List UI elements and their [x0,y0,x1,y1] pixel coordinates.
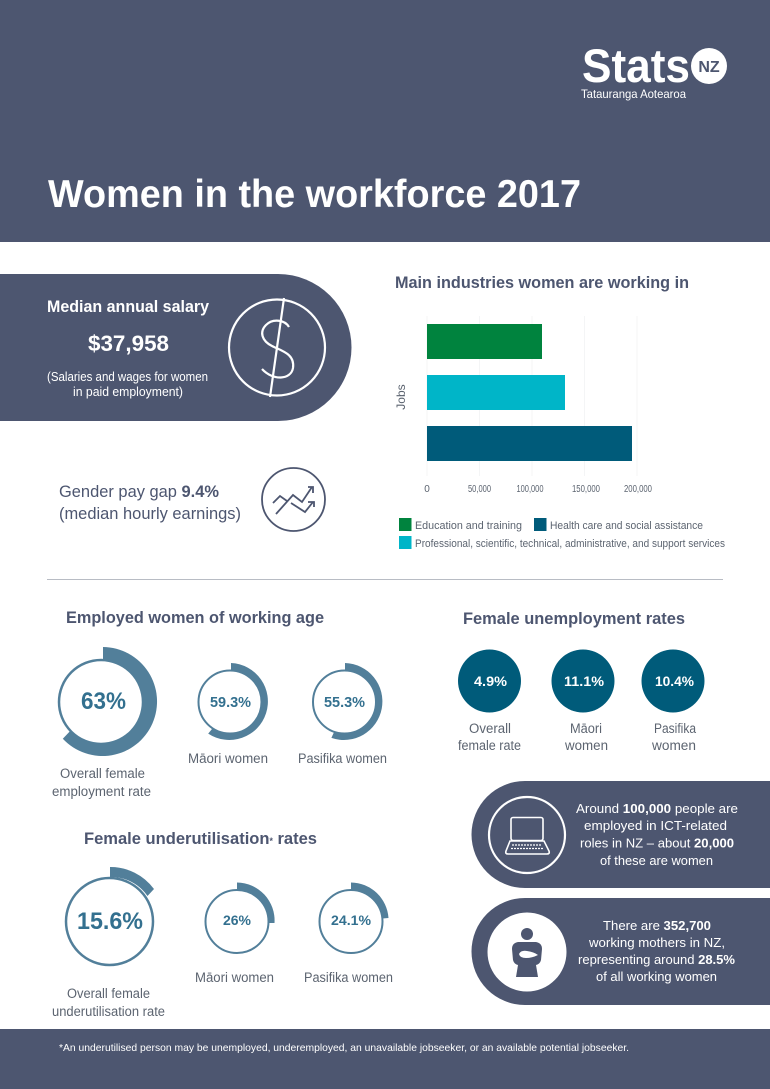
panel: employed women of working age [52,608,387,799]
gender pay gap text: Gender pay gap 9.4% [59,482,219,501]
working mothers text: There are 352,700 [603,918,711,933]
x axis tick labels: 50,000 [468,484,491,495]
label: overall female rate: female rate [458,738,521,753]
circle: Pasifika 10.4%: 10.4% [655,674,694,689]
donut: Pasifika 24.1% [320,882,388,953]
title: Women in the workforce 2017 [48,173,581,216]
legend: Professional, scientific, technical, administrative, and support services [415,538,725,550]
panel: median annual salary [0,274,352,421]
x axis tick labels [424,484,652,495]
x axis tick labels: 0 [424,484,430,495]
footer band [0,1029,770,1089]
donut: Māori 26%: 26% [223,912,252,928]
label: Pasifika women [651,721,696,753]
icon: trend lines [262,468,325,531]
donut: Māori 59.3% [198,663,268,740]
donut: Pasifika 24.1%: 24.1% [331,912,372,928]
footnote: *An underutilised person may be unemployed, underemployed, an unavailable jobseeker, or an available potential jobseeker. [59,1042,629,1054]
ICT text: of these are women [600,853,713,868]
heading: main industries: Main industries women are working in [395,273,689,292]
legend: Health care and social assistance [550,520,703,532]
label: Māori women: Māori women [188,751,268,766]
donut: overall 63% [59,647,157,756]
ICT text: employed in ICT-related [584,818,727,833]
working mothers text [578,918,735,984]
logo: Stats NZ: Stats [582,39,690,92]
circle: Māori 11.1%: 11.1% [564,674,604,689]
legend [399,518,725,550]
x axis tick labels: 100,000 [516,484,544,495]
label: Māori women [564,721,608,753]
salary value: $37,958 [88,331,169,356]
donut: Pasifika 55.3%: 55.3% [324,694,365,711]
header banner [0,0,770,242]
circle: overall 4.9%: 4.9% [474,674,507,689]
salary note: in paid employment) [73,385,183,399]
panel: working mothers [471,898,770,1005]
label: Pasifika women: Pasifika women [304,970,393,985]
circle: overall 4.9% [458,650,521,712]
heading: female unemployment: Female unemployment rates [463,609,685,628]
salary note [47,370,208,399]
panel: ICT employment [471,781,770,888]
donut: Pasifika 55.3% [313,663,382,740]
donut: overall 63%: 63% [81,688,126,715]
label: overall female rate: Overall [469,721,511,736]
ICT text: roles in NZ – about 20,000 [580,836,734,850]
label: Pasifika women: Pasifika [654,721,696,736]
label: Māori women: women [564,738,608,753]
x axis tick labels: 200,000 [624,484,652,495]
label: Pasifika women: women [651,738,696,753]
gender pay gap text: (median hourly earnings) [59,504,241,523]
logo: Stats NZ: Tatauranga Aotearoa [581,87,686,101]
gender pay gap text [59,482,241,523]
bar: education and training [427,324,542,359]
label: Māori women: Māori [570,721,602,736]
label: overall female employment rate: employment rate [52,784,151,799]
label: overall female employment rate: Overall female [60,766,145,781]
ICT text [576,801,738,868]
working mothers text: representing around 28.5% [578,952,735,967]
label: overall female underutilisation rate [52,986,165,1019]
label: Māori women: Māori women [195,970,274,985]
bar chart: main industries [394,316,725,550]
bar: health care [427,426,632,461]
icon: dollar sign [229,298,325,397]
label: overall female employment rate [52,766,151,799]
icon: laptop [489,797,565,873]
donut: Māori 26% [206,882,275,953]
label: overall female underutilisation rate: Overall female [67,986,150,1001]
panel: female unemployment rates [458,609,704,753]
donut: overall 15.6% [66,867,154,965]
donut: Māori 59.3%: 59.3% [210,694,251,711]
heading: underutilisation: Female underutilisation* rates [84,829,317,848]
circle: Pasifika 10.4% [642,650,704,712]
salary note: (Salaries and wages for women [47,370,208,384]
icon: mother and baby [488,912,566,992]
heading: median annual salary: Median annual salary [47,297,210,316]
heading: employed women: Employed women of working age [66,608,324,627]
ICT text: Around 100,000 people are [576,801,738,816]
x axis tick labels: 150,000 [572,484,600,495]
circle: Māori 11.1% [552,650,614,712]
working mothers text: of all working women [596,969,717,984]
label: Pasifika women: Pasifika women [298,751,387,766]
logo: Stats NZ [581,39,727,101]
donut: overall 15.6%: 15.6% [77,908,143,935]
working mothers text: working mothers in NZ, [588,935,725,950]
logo: Stats NZ: NZ [698,59,720,76]
label: overall female underutilisation rate: underutilisation rate [52,1004,165,1019]
label: overall female rate [458,721,521,753]
bar: professional services [427,375,565,410]
panel: female underutilisation rates [52,829,393,1019]
axis label: jobs: Jobs [394,384,408,410]
legend: Education and training [415,520,522,532]
